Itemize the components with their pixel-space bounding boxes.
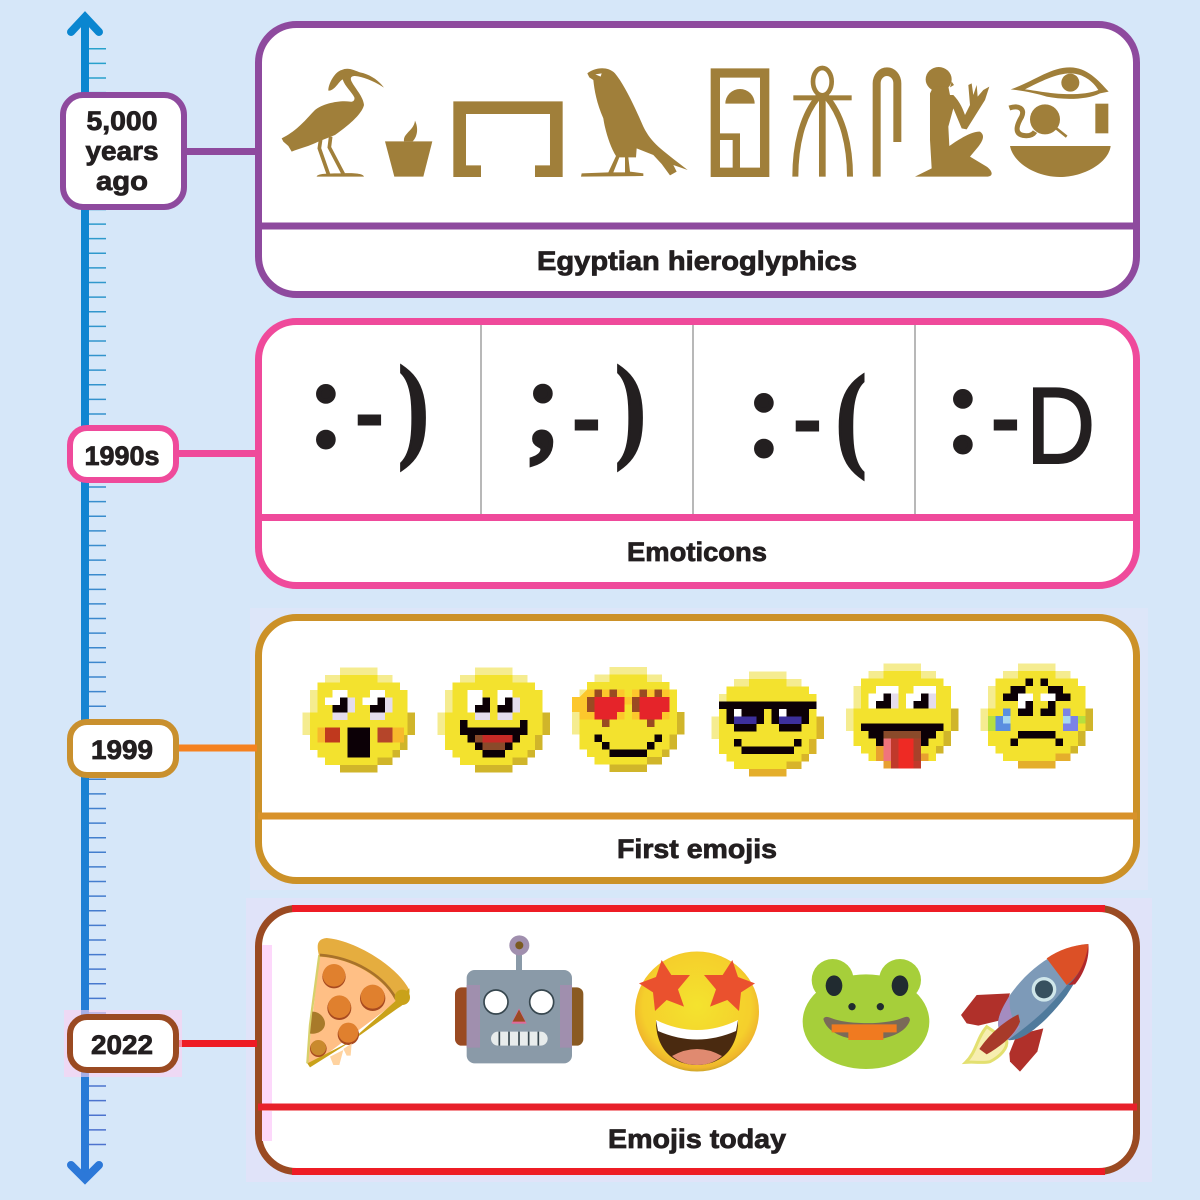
pixel emoji: heart eyes [572, 667, 684, 772]
emoji: robot [455, 935, 583, 1063]
emoticon: sad: : [747, 344, 781, 482]
panel: Egyptian hieroglyphics [258, 24, 1137, 294]
date label: 1990s: 1990s [84, 441, 160, 471]
emoticon: sad: ( [836, 354, 866, 480]
emoticon: sad: - [792, 368, 823, 470]
emoticon: smile: : [309, 335, 343, 473]
emoticon: wink: - [571, 367, 602, 469]
emoticon: big grin [946, 340, 1095, 486]
emoticon: wink: ) [615, 345, 646, 471]
heading: First emojis: First emojis [617, 834, 777, 864]
hieroglyphs right group [711, 67, 1111, 177]
panel: Emoticons [258, 322, 1137, 586]
emoji: star-struck face [635, 952, 759, 1072]
connector: 5,000 years ago [185, 148, 257, 155]
heading: Emoticons: Emoticons [627, 537, 767, 567]
emoticon: big grin: : [946, 340, 980, 478]
date label: 2022: 2022 [91, 1030, 153, 1060]
panel: Emojis today [246, 898, 1152, 1182]
emoticon: wink [526, 335, 646, 473]
heading: Emojis today: Emojis today [608, 1124, 786, 1154]
date label: 5,000 years ago: 5,000 [86, 106, 158, 136]
emoticon: sad [747, 344, 866, 482]
pixel emoji: tongue out [846, 663, 958, 768]
emoticon: smile [309, 335, 429, 473]
emoticon: smile: - [354, 362, 385, 464]
connector: 2022 [177, 1040, 257, 1047]
date label: 1990s [70, 428, 176, 480]
date label: 1999: 1999 [91, 735, 153, 765]
panel: First emojis [250, 608, 1148, 890]
heading: Egyptian hieroglyphics: Egyptian hieroglyphics [537, 246, 857, 276]
date label: 1999 [70, 722, 176, 775]
date label: 5,000 years ago [63, 95, 184, 207]
pixel emoji: crying [981, 663, 1093, 768]
date label: 2022 [64, 1010, 182, 1077]
connector: 1990s [177, 450, 257, 457]
hieroglyphs left group [282, 68, 688, 177]
timeline axis with arrows and ticks [71, 17, 99, 1179]
emoticon: smile: ) [398, 345, 429, 471]
emoji: frog [803, 959, 929, 1069]
emoji: rocket [961, 944, 1089, 1072]
emoticon: big grin: D [1026, 364, 1095, 486]
date label: 5,000 years ago: ago [96, 166, 148, 196]
pixel emoji: shocked [303, 667, 415, 772]
date label: 5,000 years ago: years [86, 136, 158, 166]
emoji: pizza [307, 938, 410, 1067]
pixel emoji: laughing [437, 667, 550, 772]
pixel emoji: sunglasses [712, 672, 824, 777]
connector: 1999 [177, 744, 257, 752]
emoticon: big grin: - [990, 367, 1021, 469]
emoticon: wink: ; [526, 335, 560, 473]
